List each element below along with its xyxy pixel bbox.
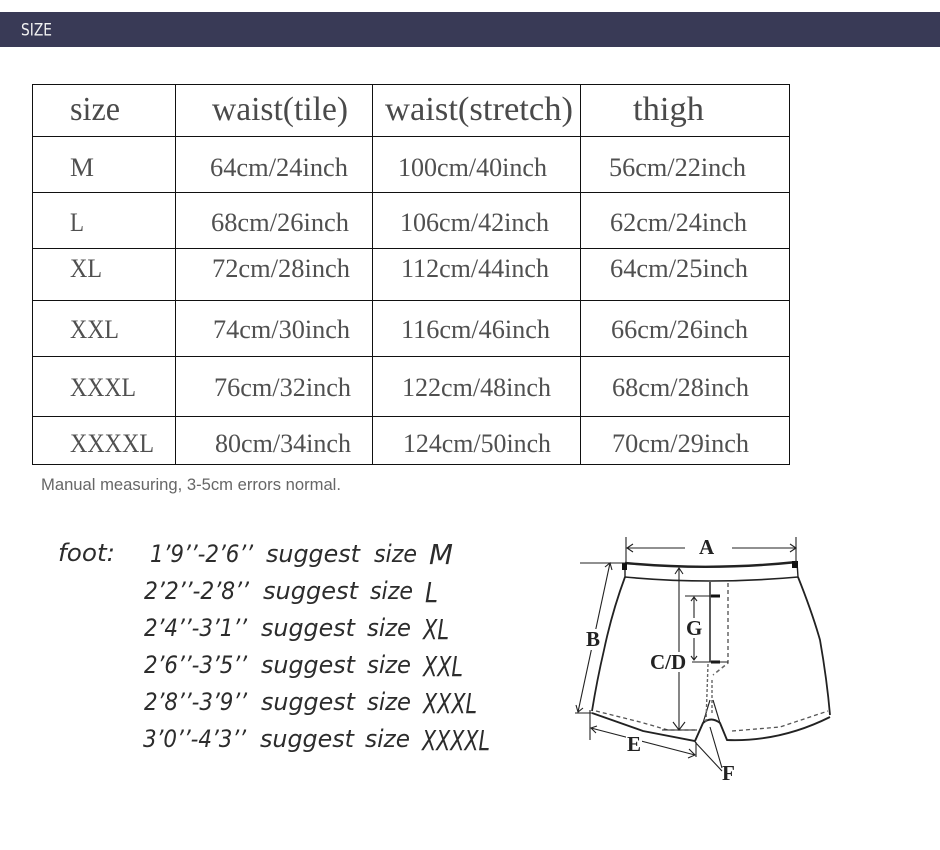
row L <box>70 208 747 237</box>
arrow: B side length <box>575 563 625 713</box>
row XL: 64cm/25inch <box>610 254 748 283</box>
arrow: B side length: B <box>586 627 600 651</box>
row L: 68cm/26inch <box>211 208 349 237</box>
suggestion XXXXL <box>143 724 490 757</box>
suggestion M: size <box>374 540 417 568</box>
suggestion XL: suggest <box>261 614 357 642</box>
suggestion L: 2’2’’-2’8’’ <box>144 577 249 605</box>
suggestion M <box>150 538 453 571</box>
row XL: 72cm/28inch <box>212 254 350 283</box>
shorts outline <box>592 561 830 741</box>
arrow: A waist width: A <box>699 535 715 559</box>
suggestion XXL: XXL <box>422 650 463 683</box>
table header row <box>70 91 704 128</box>
suggestion L: suggest <box>263 577 360 605</box>
suggestion XXXL <box>144 687 477 720</box>
row XL <box>70 254 748 283</box>
row XXL: 74cm/30inch <box>213 315 350 344</box>
size table <box>32 84 790 465</box>
row XXXXL: 124cm/50inch <box>403 429 551 458</box>
row XXXXL: 80cm/34inch <box>215 429 351 458</box>
row L: 62cm/24inch <box>610 208 747 237</box>
row M: M <box>70 153 94 182</box>
suggestion M: suggest <box>266 540 362 568</box>
measuring note: Manual measuring, 3-5cm errors normal. <box>41 476 341 494</box>
suggestion M: 1’9’’-2’6’’ <box>150 540 253 568</box>
row XXXXL: XXXXL <box>70 429 154 458</box>
suggestion M: M <box>429 538 453 571</box>
row XXL: XXL <box>70 315 119 344</box>
suggestion XL <box>144 613 449 646</box>
header bar: SIZE <box>21 20 52 40</box>
table header row: waist(stretch) <box>385 91 573 128</box>
row XXL <box>70 315 748 344</box>
arrow: A waist width <box>626 535 796 563</box>
foot size suggestions <box>58 538 490 757</box>
row XXXL: 122cm/48inch <box>402 373 551 402</box>
arrow: C/D rise <box>650 568 697 730</box>
row M: 56cm/22inch <box>609 153 746 182</box>
suggestion XL: size <box>367 614 411 642</box>
suggestion XL: 2’4’’-3’1’’ <box>144 614 247 642</box>
suggestion XXXL: suggest <box>261 688 357 716</box>
row XL: 112cm/44inch <box>401 254 549 283</box>
row L: L <box>70 208 84 237</box>
arrow: E hem: E <box>627 732 641 756</box>
row M: 100cm/40inch <box>398 153 547 182</box>
shorts measurement diagram <box>575 535 830 785</box>
table header row: size <box>70 91 120 128</box>
suggestion XXL: suggest <box>261 651 357 679</box>
arrow: G inseam pocket <box>685 596 728 662</box>
row XXXXL <box>70 429 749 458</box>
header bar <box>0 12 940 47</box>
table header row: thigh <box>633 91 704 128</box>
row XXXL: 76cm/32inch <box>214 373 351 402</box>
suggestion XXXXL: suggest <box>260 725 356 753</box>
suggestion XXXL: 2’8’’-3’9’’ <box>144 688 247 716</box>
arrow: F crotch: F <box>722 761 735 785</box>
row XXXXL: 70cm/29inch <box>612 429 749 458</box>
suggestion L: L <box>425 576 438 609</box>
suggestion XXXL: XXXL <box>422 687 477 720</box>
row L: 106cm/42inch <box>400 208 549 237</box>
suggestion XXXXL: XXXXL <box>421 724 490 757</box>
suggestion XL: XL <box>422 613 449 646</box>
suggestion XXXXL: size <box>365 725 410 753</box>
row XXXL: XXXL <box>70 373 136 402</box>
suggestion XXL: size <box>367 651 411 679</box>
arrow: G inseam pocket: G <box>686 616 702 640</box>
arrow: C/D rise: C/D <box>650 650 686 674</box>
row M: 64cm/24inch <box>210 153 348 182</box>
suggestion L <box>144 576 438 609</box>
foot label: foot: <box>58 539 115 567</box>
row XXL: 116cm/46inch <box>401 315 550 344</box>
suggestion L: size <box>370 577 413 605</box>
suggestion XXXXL: 3’0’’-4’3’’ <box>143 725 246 753</box>
row XXXL: 68cm/28inch <box>612 373 749 402</box>
suggestion XXL <box>144 650 463 683</box>
row XXXL <box>70 373 749 402</box>
suggestion XXXL: size <box>367 688 411 716</box>
arrow: F crotch <box>695 727 735 785</box>
row XXL: 66cm/26inch <box>611 315 748 344</box>
arrow: E hem <box>590 710 696 758</box>
suggestion XXL: 2’6’’-3’5’’ <box>144 651 247 679</box>
table header row: waist(tile) <box>212 91 348 128</box>
row XL: XL <box>70 254 102 283</box>
row M <box>70 153 746 182</box>
